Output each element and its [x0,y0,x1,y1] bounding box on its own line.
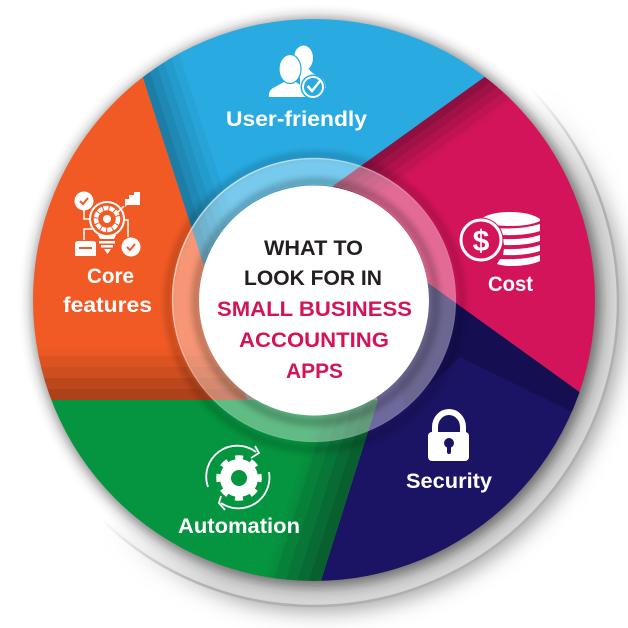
title line: apps: APPS [286,360,343,383]
panel: cost segment [332,76,595,392]
title line: look for in: LOOK FOR IN [244,267,382,290]
center title [217,237,412,383]
label: security: Security [406,470,492,493]
panel: security segment [321,283,580,581]
center white circle [199,186,429,416]
glass ring [172,158,456,442]
panel: core features segment [33,77,247,400]
label: cost: Cost [488,273,533,296]
glass ring shadow [168,155,462,449]
label: core features: Core [87,265,134,288]
label: user-friendly: User-friendly [226,108,367,131]
security segment dark band [398,283,580,412]
panel: automation segment [52,400,378,581]
icon: core features bulb [74,192,140,256]
title line: what to: WHAT TO [264,237,363,260]
icon: coin stack [458,212,540,266]
icon: coin stack: $ [473,225,490,258]
panel: user-friendly segment [142,19,485,264]
icon: padlock [428,412,469,461]
icon: users with check [269,46,326,100]
title line: accounting: ACCOUNTING [239,329,389,352]
icon: gear with cycle arrows [206,446,269,510]
label: core features [63,265,152,317]
label: core features: features [63,294,152,317]
label: automation: Automation [178,515,300,538]
title line: small business: SMALL BUSINESS [217,298,412,321]
